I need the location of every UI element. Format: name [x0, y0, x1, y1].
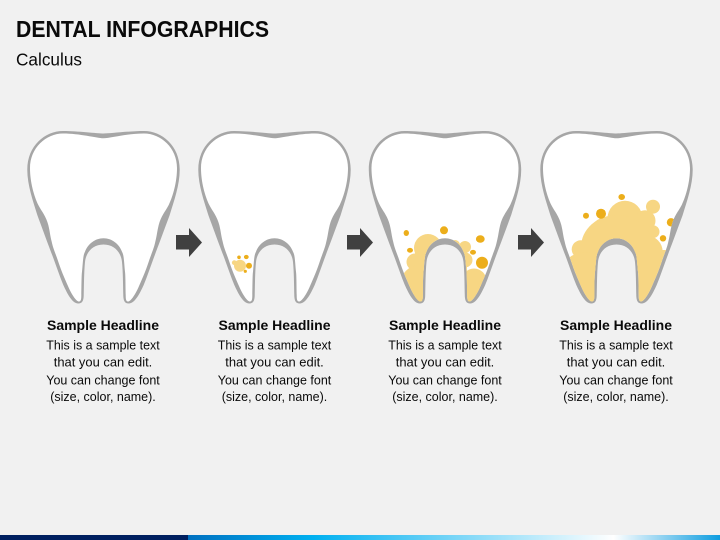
- text block 2: You can change font: [218, 373, 332, 387]
- subtitle: Calculus: [16, 50, 82, 70]
- text block 2: Sample Headline: [218, 318, 330, 333]
- text block 1: Sample Headline: [47, 318, 159, 333]
- text block 1: This is a sample text: [46, 338, 160, 352]
- footer bar: [0, 535, 720, 540]
- text block 4: (size, color, name).: [563, 390, 669, 404]
- title: DENTAL INFOGRAPHICS: [16, 16, 269, 42]
- text block 4: that you can edit.: [567, 356, 665, 370]
- text block 3: that you can edit.: [396, 356, 494, 370]
- text block 2: (size, color, name).: [222, 390, 327, 404]
- text block 1: You can change font: [46, 373, 160, 387]
- text block 3: (size, color, name).: [392, 390, 498, 404]
- text block 4: You can change font: [559, 373, 673, 387]
- text block 1: that you can edit.: [54, 356, 152, 370]
- text block 3: You can change font: [388, 373, 502, 387]
- text block 1: [46, 318, 160, 404]
- text block 4: Sample Headline: [560, 318, 672, 333]
- text block 2: This is a sample text: [218, 338, 332, 352]
- tooth 4: severe calculus: [540, 131, 693, 307]
- text block 1: (size, color, name).: [50, 390, 156, 404]
- tooth 3: moderate calculus: [369, 131, 521, 307]
- text block 3: This is a sample text: [388, 338, 502, 352]
- tooth 2: early calculus: [198, 131, 351, 304]
- arrow 2: [347, 228, 373, 257]
- text block 3: [388, 318, 502, 404]
- text block 2: [218, 318, 332, 404]
- text block 4: [559, 318, 673, 404]
- text block 4: This is a sample text: [559, 338, 673, 352]
- tooth 1: healthy: [27, 131, 180, 304]
- text block 3: Sample Headline: [389, 318, 501, 333]
- arrow 1: [176, 228, 202, 257]
- arrow 3: [518, 228, 544, 257]
- text block 2: that you can edit.: [225, 356, 324, 370]
